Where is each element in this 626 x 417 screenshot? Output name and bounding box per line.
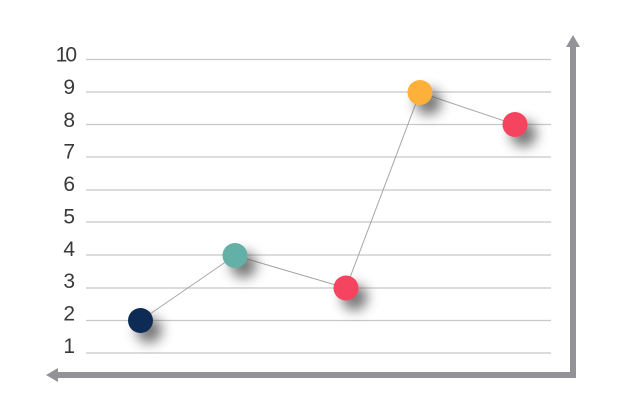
point 3: red, value 3 [334,276,368,310]
y-axis labels: 5 [63,206,75,228]
y-axis labels: 4 [63,238,75,261]
y-axis labels [56,44,76,358]
axes arrows [46,35,580,382]
y-axis labels: 3 [63,270,75,293]
y-axis labels: 7 [63,140,75,164]
point 4: amber, value 9 [408,80,442,115]
point 2: teal, value 4 [222,243,256,278]
y-axis labels: 1 [63,335,75,358]
data points [128,80,536,343]
y-axis labels: 6 [63,173,75,196]
y-axis labels: 9 [63,76,75,99]
y-axis labels: 8 [63,109,75,132]
point 1: navy, value 2 [128,308,162,343]
y-axis labels: 2 [63,302,75,326]
connecting data line [140,92,515,320]
point 5: red, value 8 [502,112,536,147]
y-axis labels: 10 [56,44,76,66]
